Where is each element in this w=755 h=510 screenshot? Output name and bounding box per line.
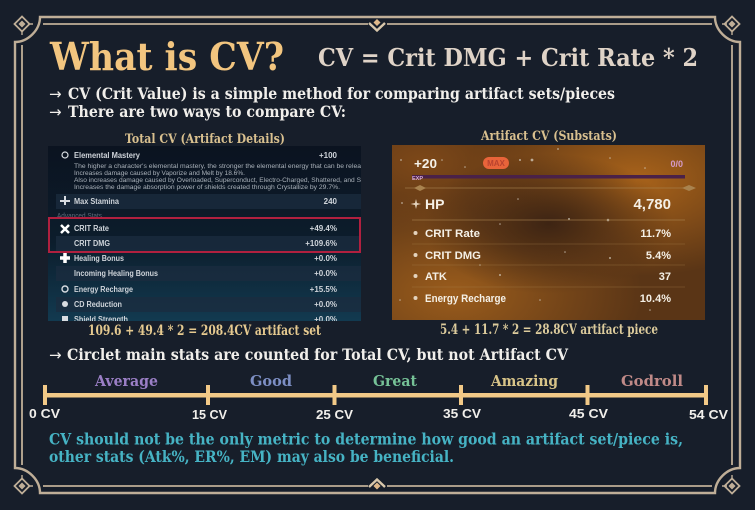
panel: artifact details screenshot [48,146,362,324]
value labels: 54 CV [689,407,728,422]
intro text: There are two ways to compare CV: [68,102,346,121]
title: What is CV? [49,34,284,79]
substats: CRIT DMG [425,250,481,262]
panel: artifact details screenshot: +0.0% [314,315,337,324]
intro text: → [49,103,62,121]
formula: CV = Crit DMG + Crit Rate * 2 [318,43,698,72]
substats: ATK [425,271,447,283]
substats: Energy Recharge [425,293,506,305]
panel: artifact details screenshot: Max Stamina [74,197,120,206]
scale line [43,385,708,405]
intro text: → [49,85,62,103]
panel: artifact details screenshot: CRIT DMG [74,239,110,248]
panel: artifact details screenshot: +0.0% [314,254,337,263]
panel: artifact details screenshot: Advanced Stats [57,213,102,220]
equation: artifact set: 109.6 + 49.4 * 2 = 208.4CV artifact set [88,323,321,339]
tier labels: Good [250,372,292,390]
tier labels: Great [373,372,417,390]
substats [425,228,671,305]
dividers [405,188,695,287]
panel: artifact substats screenshot: EXP [412,176,423,182]
panel: artifact substats screenshot: MAX [487,159,506,168]
panel: artifact details screenshot: Also increases damage caused by Overloaded, Superconduct, Electro-Charged, Shattered, and S [74,178,361,184]
red highlight box [49,218,360,252]
panel: artifact details screenshot: +100 [319,151,338,160]
panel: artifact details screenshot: +49.4% [310,224,337,233]
equation: artifact piece: 5.4 + 11.7 * 2 = 28.8CV artifact piece [440,322,658,338]
circlet note: → [49,346,62,364]
panel: artifact substats screenshot: 0/0 [670,159,683,169]
panel: artifact details screenshot: +15.5% [310,285,337,294]
panel: artifact details screenshot: 240 [324,197,338,206]
CV rating scale [29,372,728,422]
substats: 11.7% [640,228,671,240]
panel: artifact details screenshot: The higher a character's elemental mastery, the stronger the elemental energy that can be relea [74,164,362,170]
panel: artifact details screenshot: Shield Strength [74,315,128,324]
intro text [49,84,615,121]
heading: total CV: Total CV (Artifact Details) [125,132,285,147]
panel: artifact details screenshot: Increases damage caused by Vaporize and Melt by 18.6%. [74,171,245,177]
panel: artifact substats screenshot [392,145,705,320]
value labels [29,406,728,422]
substats: CRIT Rate [425,228,480,240]
panel: artifact details screenshot: Energy Recharge [74,285,133,294]
closing note: other stats (Atk%, ER%, EM) may also be beneficial. [49,447,454,466]
panel: artifact details screenshot: Healing Bonus [74,254,124,263]
panel: artifact substats screenshot: HP [425,196,444,212]
intro text: CV (Crit Value) is a simple method for comparing artifact sets/pieces [68,84,615,103]
value labels: 45 CV [569,406,608,421]
value labels: 0 CV [29,406,60,421]
heading: artifact CV: Artifact CV (Substats) [480,129,617,144]
tier labels: Godroll [621,372,683,390]
panel: artifact details screenshot: +0.0% [314,269,337,278]
panel: artifact details screenshot: CRIT Rate [74,224,109,233]
main stat [410,199,421,209]
level and MAX badge: +20 [414,156,437,171]
stat icons [60,152,70,322]
tier labels: Amazing [490,372,558,390]
panel: artifact details screenshot: Incoming Healing Bonus [74,269,158,278]
closing note [49,430,683,466]
tier labels [94,372,683,390]
circlet note: Circlet main stats are counted for Total CV, but not Artifact CV [67,345,569,364]
value labels: 15 CV [192,407,227,422]
panel: artifact details screenshot: CD Reduction [74,300,122,309]
EXP bar [412,175,685,178]
panel: artifact details screenshot: +0.0% [314,300,337,309]
panel: artifact details screenshot: Increases the damage absorption power of shields created through Crystallize by 29.7%. [74,185,340,191]
substats: 5.4% [646,250,671,262]
value labels: 35 CV [443,406,481,421]
closing note: CV should not be the only metric to determine how good an artifact set/piece is, [49,430,683,448]
panel: artifact details screenshot: +109.6% [305,239,337,248]
substats: 10.4% [640,293,671,305]
value labels: 25 CV [316,407,353,422]
tier labels: Average [94,372,158,390]
panel: artifact details screenshot: Elemental Mastery [74,151,141,160]
panel: artifact substats screenshot: 4,780 [633,196,671,213]
substats: 37 [659,271,671,283]
